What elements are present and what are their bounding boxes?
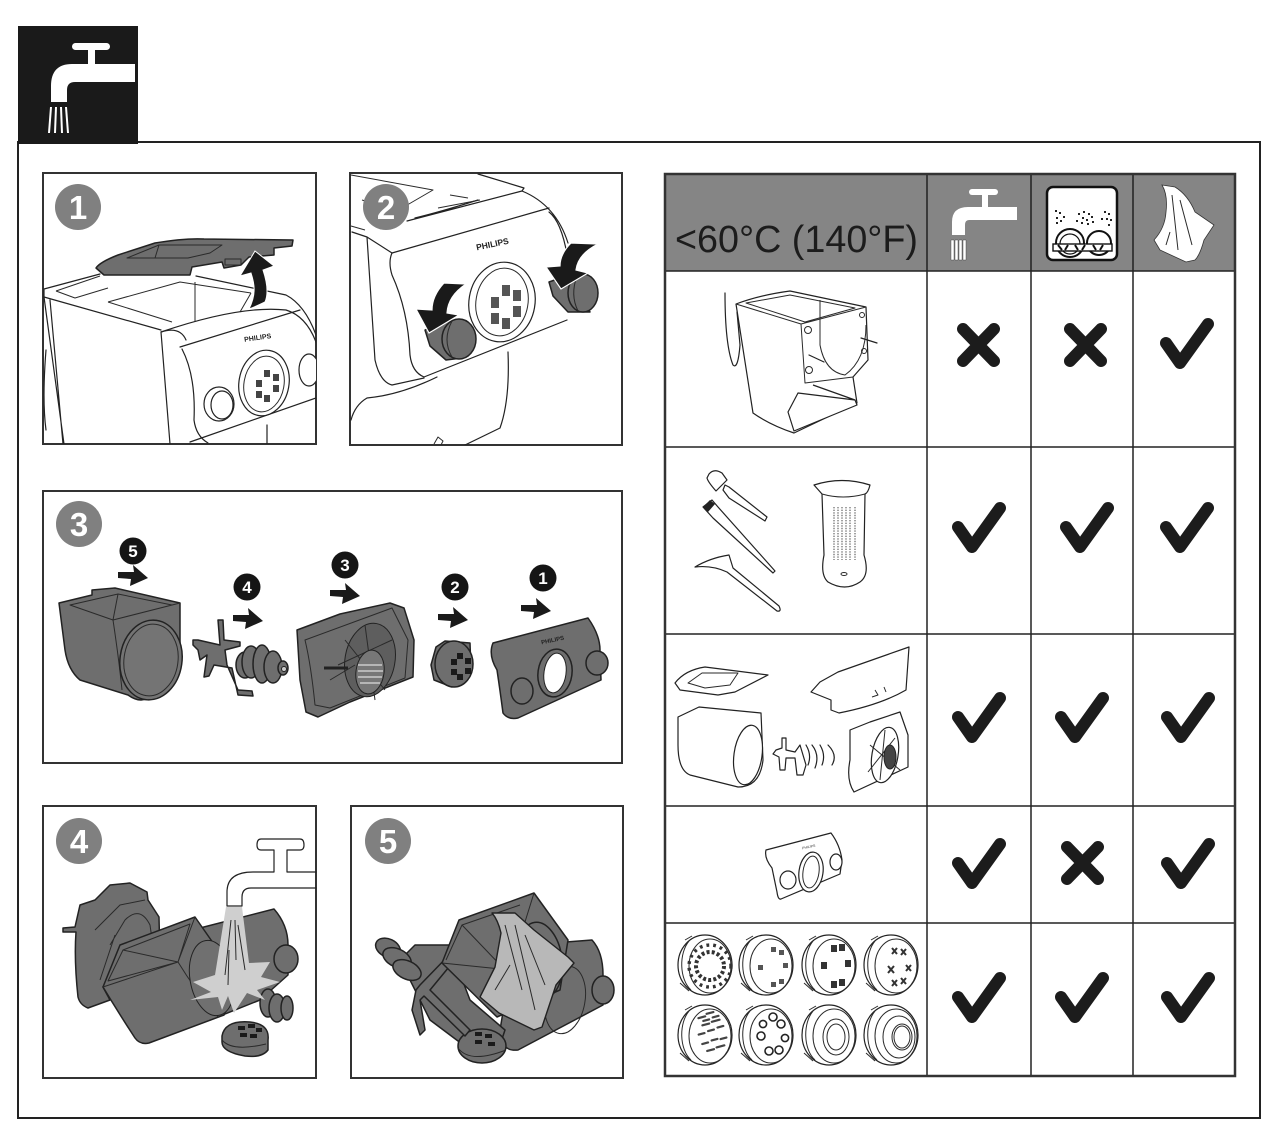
order marker 4: [233, 574, 263, 629]
grid: [665, 174, 1235, 1076]
disc: dots: [678, 935, 732, 995]
faucet: [227, 839, 316, 906]
part 3: housing: [297, 603, 414, 717]
disc: concentric B: [864, 1005, 918, 1065]
water splash: [190, 907, 280, 1013]
part 4: worm: [193, 620, 288, 696]
row 5 illustration: pasta discs: [678, 935, 918, 1065]
philips label: PHILIPS: [244, 333, 272, 344]
panel: step 4: [43, 806, 316, 1078]
panel: step 5: [351, 806, 623, 1078]
badge 4: 4: [70, 823, 89, 860]
badge 2: 2: [377, 189, 395, 226]
arrow right: [546, 243, 598, 289]
philips label: PHILIPS: [541, 636, 565, 646]
badge 1: [55, 184, 101, 230]
heading: temperature: <60°C (140°F): [675, 219, 918, 261]
badge 5: 5: [379, 823, 397, 860]
right cylinder: [200, 909, 298, 1020]
right cylinder: [500, 940, 614, 1050]
order marker 1: 1: [538, 569, 548, 588]
worm and blade: [372, 934, 470, 1036]
lid: [96, 239, 293, 275]
badge 2: [363, 184, 409, 230]
row 3 marks: [958, 698, 1209, 737]
row 2 marks: [958, 508, 1208, 547]
machine front: [351, 174, 568, 445]
disc: slots: [678, 1005, 732, 1065]
part 2: disc: [431, 641, 473, 687]
table: cleaning methods: [665, 174, 1235, 1076]
cloth: [480, 913, 574, 1030]
badge 4: [56, 818, 102, 864]
order marker 3: [330, 552, 360, 604]
disc: squares: [802, 935, 856, 995]
philips label: PHILIPS: [475, 236, 510, 252]
order marker 3: 3: [340, 556, 350, 575]
row 1 illustration: base unit: [725, 291, 877, 433]
order marker 5: 5: [128, 542, 138, 561]
disc: flowers: [739, 935, 793, 995]
knobs: [204, 387, 234, 421]
filter disc: [222, 1022, 268, 1056]
disc: rings: [739, 1005, 793, 1065]
panel: step 3: [43, 491, 622, 763]
panel: step 1: [43, 173, 319, 444]
table header: [665, 174, 1235, 271]
row 4 illustration: front panel: [766, 833, 842, 899]
icon: dishwasher: [1047, 187, 1117, 260]
badge 5: [365, 818, 411, 864]
row 3 illustration: removable parts: [675, 647, 909, 792]
arrow left: [416, 283, 466, 333]
filter ring: [238, 350, 290, 416]
knob left: [425, 319, 476, 360]
badge 3: 3: [70, 506, 88, 543]
row 2 illustration: tools and beaker: [695, 471, 870, 611]
icon: cloth: [1154, 185, 1214, 262]
tank: [442, 893, 568, 1017]
arrow up: [240, 251, 274, 309]
panel: step 2: [350, 173, 622, 445]
disc: crosses: [864, 935, 918, 995]
worm: [260, 989, 293, 1022]
back housing: [63, 883, 160, 1008]
icon: tap section tab: [18, 26, 138, 144]
disc: concentric A: [802, 1005, 856, 1065]
badge 3: [56, 501, 102, 547]
icon: tap: [951, 189, 1017, 260]
machine body: [44, 274, 316, 444]
part 5: tank: [59, 588, 187, 704]
middle housing and filter disc: [400, 945, 506, 1063]
knob right: [549, 274, 598, 312]
part 1: front panel: [491, 618, 608, 718]
order marker 4: 4: [242, 578, 252, 597]
order marker 2: 2: [450, 578, 460, 597]
order marker 2: [438, 574, 468, 628]
order marker 5: [118, 538, 148, 586]
row 1 marks: [963, 324, 1208, 363]
badge 1: 1: [69, 189, 87, 226]
tank: [103, 917, 240, 1043]
row 5 marks: [958, 978, 1209, 1017]
order marker 1: [521, 564, 556, 619]
row 4 marks: [958, 844, 1209, 883]
row 4 illustration: front panel: PHILIPS: [802, 844, 816, 850]
filter ring: [468, 262, 536, 342]
